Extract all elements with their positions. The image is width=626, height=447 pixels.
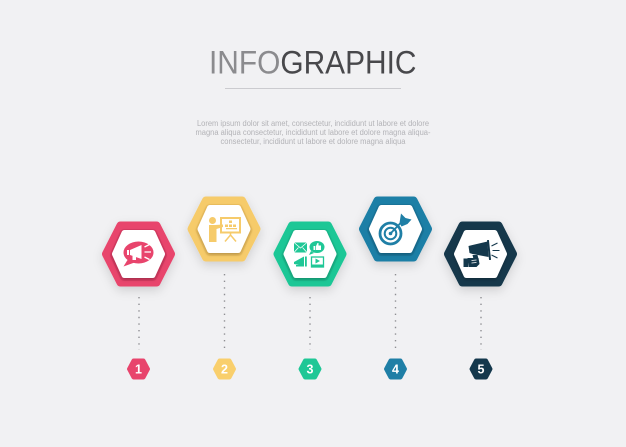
number badge 2 [215, 360, 234, 378]
icon: envelope, thumbs up, megaphone, video [294, 241, 324, 267]
item 3: green hexagon [278, 226, 342, 282]
icon: megaphone in speech bubble [124, 242, 154, 266]
icon: presenter with board [209, 217, 240, 242]
intro text: Lorem ipsum dolor sit amet, consectetur, incididunt ut labore et dolore [197, 119, 430, 128]
intro text [196, 119, 431, 146]
number badge 4 [386, 360, 405, 378]
icon: target with arrow [380, 214, 412, 244]
item 2: yellow hexagon [192, 200, 256, 258]
icon: hand holding megaphone [464, 240, 500, 267]
number badge 1: 1 [135, 362, 142, 376]
dotted connectors [139, 274, 481, 350]
number badge 5 [472, 360, 490, 378]
number badge 1 [129, 360, 148, 378]
number badge 3 [300, 360, 320, 378]
intro text: consectetur, incididunt ut labore et dolore magna aliqua [220, 137, 406, 146]
item 1: red hexagon [106, 226, 171, 282]
number badge 3: 3 [307, 362, 314, 376]
intro text: magna aliqua consectetur, incididunt ut labore et dolore magna aliqua- [196, 128, 431, 137]
number badge 5: 5 [478, 362, 485, 376]
item 4: blue hexagon [363, 200, 428, 258]
number badge 4: 4 [392, 362, 399, 376]
item 5: navy hexagon [448, 226, 513, 282]
title: INFOGRAPHIC [209, 44, 416, 80]
number badge 2: 2 [221, 362, 228, 376]
